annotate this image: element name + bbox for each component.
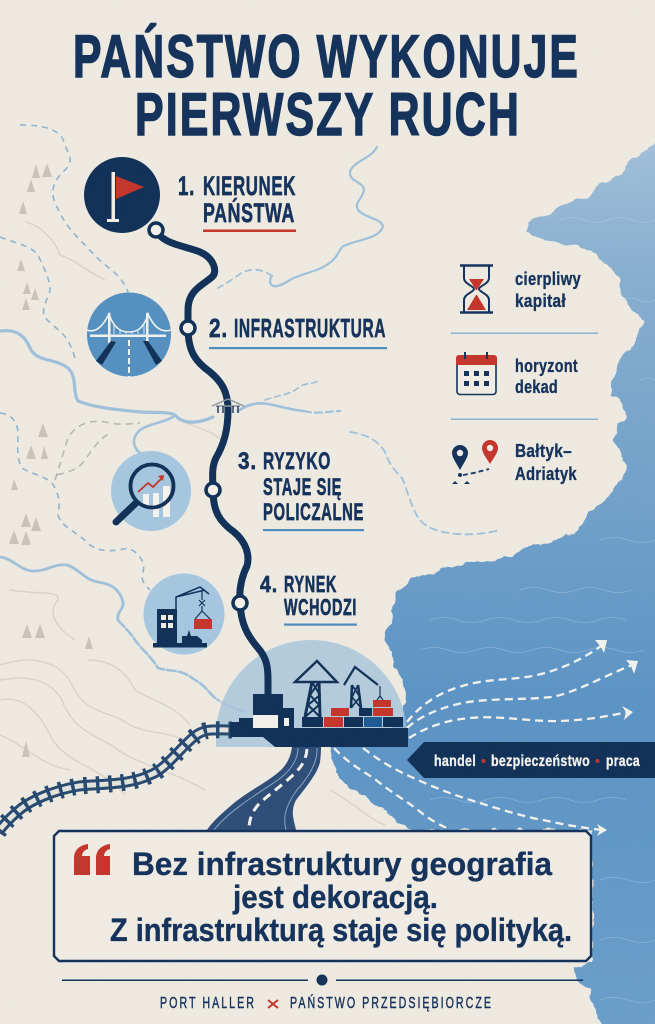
railway — [0, 730, 232, 832]
icon: hourglass — [460, 266, 493, 312]
icon: map pins — [452, 440, 498, 484]
step 1 label: KIERUNEK — [203, 171, 296, 201]
item: decades horizon — [515, 356, 578, 397]
step 4 label: RYNEK — [284, 571, 337, 597]
icon: small bridge over river — [212, 399, 244, 413]
icon: magnifier with chart — [111, 451, 191, 531]
crane 2 — [344, 667, 383, 708]
rivers — [0, 147, 500, 712]
quote text: Z infrastrukturą staje się polityką. — [110, 912, 572, 948]
item: patient capital: kapitał — [515, 291, 566, 311]
item: patient capital — [515, 269, 581, 311]
sea wave texture — [420, 218, 655, 1002]
step 3 label — [238, 448, 364, 531]
quote text — [110, 846, 572, 948]
step 3 label: 3. — [238, 448, 257, 475]
step 4 label — [260, 571, 357, 626]
step 2 label: 2. — [209, 313, 228, 343]
contour lines — [0, 222, 385, 825]
icon: flag — [84, 157, 160, 233]
crane 1 — [295, 661, 337, 717]
title — [73, 23, 580, 148]
step 4 label: 4. — [260, 571, 278, 597]
node 3 — [206, 483, 220, 497]
item: Baltic-Adriatic — [515, 441, 577, 484]
icon: building and crane — [144, 574, 224, 654]
footer text: PAŃSTWO PRZEDSIĘBIORCZE — [290, 993, 493, 1012]
icon: quotation marks — [74, 844, 110, 875]
footer text — [160, 993, 493, 1012]
shipping arrows — [334, 646, 632, 830]
footer rule — [62, 974, 583, 986]
item: Baltic-Adriatic: Bałtyk– — [515, 441, 572, 461]
item: decades horizon: horyzont — [515, 356, 578, 376]
step 2 label: INFRASTRUKTURA — [234, 313, 386, 343]
footer text: PORT HALLER — [160, 995, 256, 1012]
quote text: jest dekoracją. — [232, 879, 438, 915]
arrowheads — [595, 640, 638, 836]
quote text: Bez infrastruktury geografia — [132, 846, 552, 882]
node 1 — [149, 223, 163, 237]
step 2 label — [209, 313, 387, 349]
item: Baltic-Adriatic: Adriatyk — [515, 464, 577, 484]
icon: suspension bridge — [87, 292, 171, 377]
step 3 label: POLICZALNE — [263, 499, 364, 526]
step 4 label: WCHODZI — [284, 594, 357, 620]
step 3 label: STAJE SIĘ — [263, 474, 342, 501]
sea with torn coastline — [328, 118, 655, 1024]
step 3 label: RYZYKO — [263, 448, 331, 475]
port dome — [216, 640, 407, 747]
containers — [302, 700, 403, 727]
route line — [156, 230, 268, 700]
step 1 label: 1. — [178, 171, 195, 201]
road — [207, 747, 321, 830]
banner: handel — [434, 753, 476, 770]
banner — [407, 742, 655, 778]
grey dashed roads — [55, 421, 140, 480]
port terminal and ship — [230, 661, 408, 747]
dashed borders — [0, 125, 150, 590]
item: decades horizon: dekad — [515, 377, 558, 397]
banner: bezpieczeństwo — [491, 753, 590, 770]
step 1 label — [178, 171, 296, 232]
node 2 — [181, 321, 195, 335]
step 1 label: PAŃSTWA — [203, 197, 295, 228]
item: patient capital: cierpliwy — [515, 269, 581, 289]
node 4 — [233, 596, 247, 610]
mountains — [9, 163, 93, 757]
quote box — [54, 831, 591, 961]
icon: calendar — [456, 352, 497, 394]
banner: praca — [606, 753, 640, 770]
